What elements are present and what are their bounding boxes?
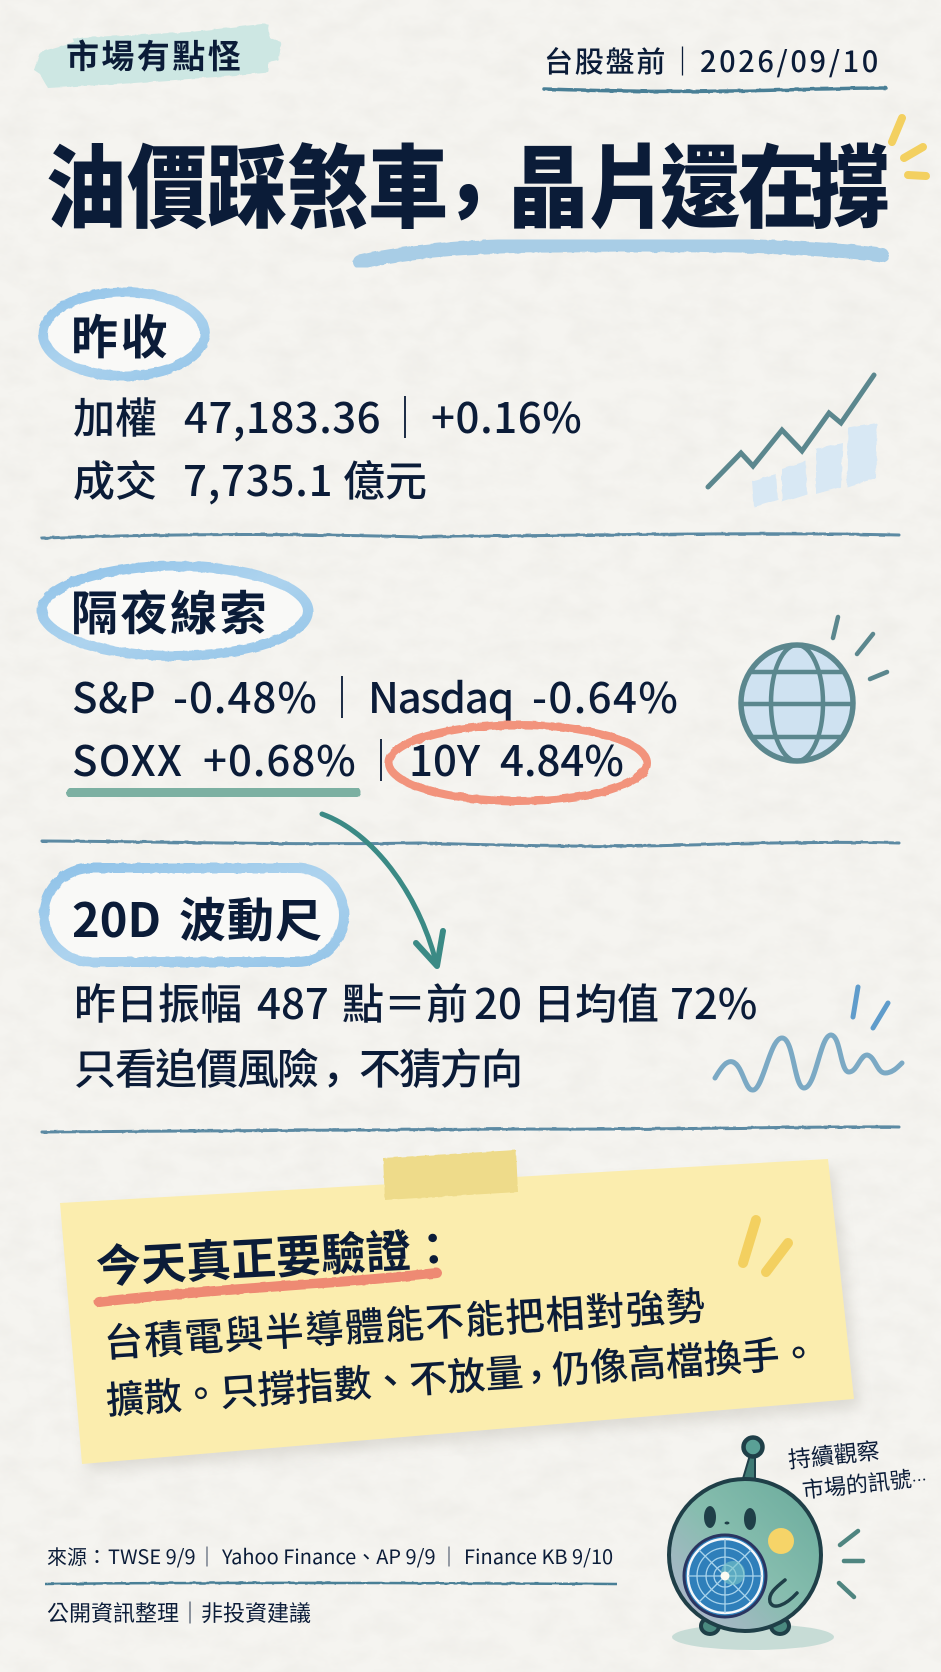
turnover line: 成交: [73, 448, 157, 509]
callout: sticky note: [60, 1150, 860, 1472]
title underline brush: [360, 245, 882, 262]
header tag: 市場有點怪: [66, 30, 243, 78]
arm: [770, 1580, 797, 1606]
title: 油價踩煞車: [46, 115, 448, 246]
date line: ｜: [668, 39, 697, 81]
disclaimer: 公開資訊整理｜非投資建議: [47, 1596, 311, 1628]
sources line: ｜: [439, 1541, 459, 1570]
index line: +0.16%: [431, 385, 582, 446]
note body line 2: 擴散。只撐指數、不放量: [104, 1342, 525, 1425]
title: ，: [428, 129, 508, 260]
SOXX and 10Y line: SOXX: [72, 728, 183, 789]
divider: [42, 1127, 899, 1132]
amplitude line: 昨日振幅: [74, 971, 242, 1032]
SOXX underline: [72, 792, 355, 793]
heading: 昨收: [43, 292, 205, 376]
header tag: [34, 24, 281, 88]
amplitude line: 72%: [670, 971, 757, 1032]
sources line: 來源：: [47, 1541, 107, 1570]
date line: [544, 39, 886, 91]
SOXX and 10Y line: +0.68%: [203, 728, 357, 789]
signal ticks: [839, 1531, 863, 1597]
divider: [42, 841, 899, 846]
heading: 20D 波動尺: 波動尺: [179, 882, 323, 951]
sources line: Yahoo Finance、AP 9/9: [221, 1541, 436, 1570]
icon: wave: [715, 987, 902, 1090]
heading: 20D 波動尺: [44, 868, 344, 962]
heading: 隔夜線索: 隔夜線索: [71, 575, 269, 644]
tape: [383, 1150, 518, 1200]
icon: title sparkle: [892, 118, 926, 176]
footer rule: [45, 1583, 617, 1584]
note heading underline: [99, 1273, 437, 1302]
icon: note sparkle: [743, 1220, 788, 1272]
mascot: radar robot: [669, 1438, 863, 1650]
note body line 2: 仍像高檔換手。: [550, 1322, 819, 1395]
risk line: 不猜方向: [359, 1036, 523, 1097]
SOXX and 10Y line: 10Y: [409, 728, 481, 789]
panel: 隔夜線索: [42, 566, 887, 801]
index line: 47,183.36: [184, 385, 381, 446]
panel: 20D 波動尺: [44, 868, 902, 1108]
title: [46, 115, 890, 260]
turnover line: 7,735.1: [183, 448, 333, 509]
heading: 昨收: 昨收: [71, 299, 170, 368]
arrow: SOXX to volatility: [322, 814, 443, 966]
feet: [701, 1618, 789, 1634]
title: 晶片還在撐: [508, 115, 890, 246]
heading: 隔夜線索: [42, 566, 308, 656]
panel: 昨收: [43, 292, 877, 509]
amplitude line: 487: [257, 971, 329, 1032]
antenna: [742, 1438, 762, 1482]
date line: 2026/09/10: [700, 39, 881, 81]
eyes: [704, 1506, 756, 1530]
speech text: 持續觀察: [786, 1432, 881, 1475]
SOXX and 10Y line: 4.84%: [500, 728, 624, 789]
amplitude line: 20: [474, 971, 522, 1032]
highlight ring: 10Y: [389, 725, 647, 801]
heading: 20D 波動尺: 20D: [72, 882, 161, 951]
speech text: 市場的訊號…: [800, 1460, 928, 1505]
note body line 1: 台積電與半導體能不能把相對強勢: [102, 1275, 708, 1369]
date line: 台股盤前: [544, 39, 667, 81]
US indexes line: S&P: [72, 665, 156, 726]
amplitude line: 日均值: [533, 971, 659, 1032]
icon: globe: [741, 617, 887, 761]
note heading: 今天真正要驗證：: [94, 1212, 457, 1296]
note body line 2: ，: [515, 1345, 557, 1403]
US indexes line: ｜: [321, 665, 363, 726]
sources line: ｜: [197, 1541, 217, 1570]
speech text: [786, 1432, 928, 1505]
index line: ｜: [384, 385, 426, 446]
sources line: Finance KB 9/10: [464, 1541, 613, 1570]
icon: rising chart: [708, 375, 877, 507]
amplitude line: 點＝前: [342, 971, 468, 1032]
US indexes line: -0.48%: [173, 665, 318, 726]
index line: 加權: [73, 385, 157, 446]
sources line: TWSE 9/9: [108, 1541, 196, 1570]
SOXX and 10Y line: ｜: [360, 728, 402, 789]
radar dial: [684, 1535, 766, 1617]
US indexes line: Nasdaq: [368, 665, 513, 726]
risk line: 只看追價風險: [74, 1036, 319, 1097]
US indexes line: -0.64%: [532, 665, 679, 726]
divider: [42, 534, 899, 538]
risk line: ，: [312, 1047, 354, 1108]
turnover line: 億元: [343, 448, 427, 509]
